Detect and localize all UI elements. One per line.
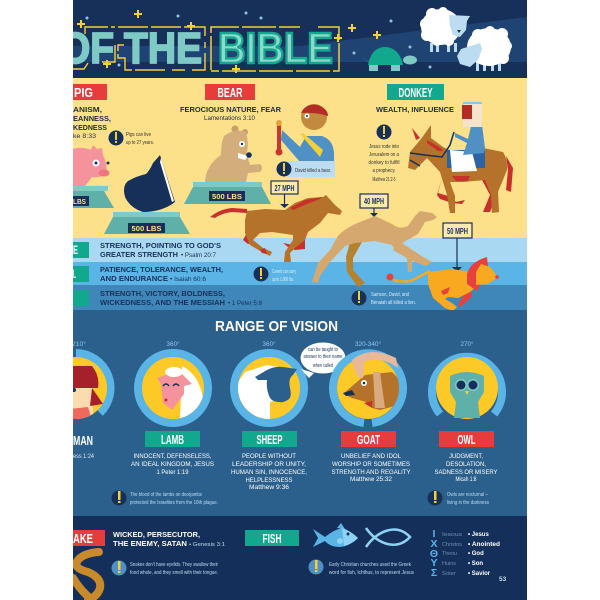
Greek acrostic: Iesous: [442, 532, 463, 538]
goat label and text: Matthew 25:32: [350, 477, 393, 483]
donkey fact: donkey to fulfill: [368, 160, 400, 166]
snake traits: • Genesis 3:1: [189, 542, 225, 548]
icon: fish: [313, 523, 358, 547]
title: THE: [124, 24, 202, 73]
pig traits: [73, 107, 110, 138]
degree labels: 210°: [72, 342, 87, 348]
circle: owl: [432, 357, 502, 419]
snake fact: food whole, and they smell with their tongue.: [130, 570, 218, 576]
icon: horse: [210, 195, 342, 262]
speech bubble: can be taught to: [308, 347, 338, 353]
lamb label and text: AN IDEAL KINGDOM, JESUS: [131, 461, 215, 468]
lamb label and text: 1 Peter 1:19: [156, 470, 189, 476]
pig traits: EANNESS,: [73, 114, 111, 123]
lion row: STRENGTH, VICTORY, BOLDNESS,: [100, 291, 225, 298]
snake fact: [112, 560, 218, 576]
circle: lamb: [138, 353, 208, 423]
fish label: FISH: [262, 531, 282, 546]
speed tag: 50 MPH: [443, 223, 472, 272]
icon: pig: [73, 145, 110, 186]
donkey fact: a prophecy.: [372, 168, 396, 174]
lion fact: [352, 290, 416, 306]
bear scale: 500 LBS: [212, 192, 242, 201]
owl fact: living in the darkness: [447, 500, 489, 506]
lion fact: Samson, David, and: [371, 292, 409, 298]
fish fact: Early Christian churches used the Greek: [329, 562, 411, 568]
icon: sheep sleeping: [457, 26, 512, 71]
lamb label and text: [131, 431, 215, 476]
donkey fact: Jesus rode into: [369, 144, 399, 150]
bear label: BEAR: [218, 85, 243, 100]
goat label and text: WORSHIP OR SOMETIMES: [332, 461, 411, 468]
Greek acrostic: Ι: [433, 528, 436, 540]
speech bubble: when called: [313, 363, 333, 369]
stars: [77, 10, 432, 73]
fact icon: David: [276, 162, 292, 176]
snake traits: WICKED, PERSECUTOR,: [113, 532, 200, 539]
sheep label and text: PEOPLE WITHOUT: [242, 453, 296, 460]
degree labels: [73, 342, 474, 346]
pig scale: LBS: [73, 199, 86, 206]
panel: header: [60, 0, 527, 78]
pig traits: ke 8:33: [73, 134, 97, 140]
camel row: PATIENCE, TOLERANCE, WEALTH,: [100, 267, 223, 274]
camel fact: up to 1,000 lbs.: [272, 277, 294, 283]
snake traits: THE ENEMY, SATAN: [113, 541, 187, 548]
speed tag: 40 MPH: [360, 194, 388, 217]
sheep label and text: HELPLESSNESS: [246, 477, 293, 484]
icon: sheep standing: [420, 7, 470, 52]
snake traits: [113, 532, 225, 548]
heading: RANGE OF VISION: [215, 318, 338, 335]
donkey fact: Jerusalem on a: [369, 152, 399, 158]
speed tag: 27 MPH: 27 MPH: [274, 184, 295, 193]
circle: sheep: [234, 353, 304, 423]
speed tag: 50 MPH: 50 MPH: [447, 227, 468, 236]
goat label and text: GOAT: [357, 432, 380, 447]
title: BIBLE: [218, 24, 333, 73]
woman label and text: [73, 433, 95, 460]
bear traits: FEROCIOUS NATURE, FEAR: [180, 105, 282, 114]
lamb label and text: LAMB: [161, 432, 184, 447]
degree labels: 360°: [166, 342, 180, 348]
fish fact: [308, 560, 414, 576]
Greek acrostic: Soter: [442, 571, 456, 577]
icon: snake: [73, 552, 100, 600]
donkey fact: [368, 124, 400, 183]
horse row: E: [73, 243, 78, 257]
panel: snake and fish: [73, 516, 527, 600]
horse row: [73, 242, 221, 259]
lamb fact: protected the Israelites from the 10th plague.: [130, 500, 218, 506]
fish label: [245, 530, 299, 546]
owl label and text: DESOLATION,: [446, 461, 486, 468]
owl label and text: [434, 431, 498, 483]
bear scale: [184, 182, 271, 204]
pig traits: KEDNESS: [73, 123, 107, 132]
degree labels: 320-340°: [355, 342, 382, 348]
owl fact: [428, 490, 489, 506]
camel row: AND ENDURANCE: [100, 276, 168, 283]
camel row: L: [73, 267, 76, 281]
woman label and text: MAN: [73, 433, 93, 448]
speech bubble: answer to their name: [304, 354, 343, 360]
Greek acrostic: Θ: [430, 548, 438, 560]
owl label and text: JUDGMENT,: [449, 453, 483, 460]
Greek acrostic: • Anointed: [468, 542, 500, 548]
pig fact: Pigs can live: [126, 132, 151, 138]
Greek acrostic: Theou: [442, 551, 457, 557]
donkey label: [387, 84, 444, 100]
pig scale: [73, 186, 114, 208]
horse row: GREATER STRENGTH: [100, 252, 178, 259]
circle: goat: [333, 352, 403, 423]
owl fact: Owls are nocturnal –: [447, 492, 488, 498]
donkey traits: WEALTH, INFLUENCE: [376, 105, 454, 114]
sheep label and text: SHEEP: [256, 432, 283, 447]
goat label and text: UNBELIEF AND IDOL: [341, 453, 401, 460]
title: OF: [60, 24, 114, 73]
Greek acrostic: • Son: [468, 561, 483, 567]
panel: large animals on yellow: [73, 78, 527, 238]
sheep label and text: Matthew 9:36: [249, 485, 290, 491]
camel row: • Isaiah 60:6: [170, 277, 207, 283]
icon: turtle: [362, 47, 417, 71]
icon: lion: [386, 257, 499, 311]
snake label: AKE: [73, 531, 93, 546]
sheep label and text: HUMAN SIN, INNOCENCE,: [231, 469, 307, 476]
Greek acrostic: • Jesus: [468, 532, 489, 538]
icon: donkey and rider: [408, 102, 513, 213]
Greek acrostic: • God: [468, 551, 484, 557]
panel: meaning bands: [73, 238, 527, 310]
horse row: STRENGTH, POINTING TO GOD'S: [100, 243, 221, 250]
snake fact: Snakes don't have eyelids. They swallow their: [130, 562, 218, 568]
donkey label: DONKEY: [398, 85, 433, 100]
speed tag: 40 MPH: 40 MPH: [364, 197, 384, 206]
icon: ichthys: [366, 528, 410, 547]
title: [73, 26, 340, 72]
lion row: [73, 290, 263, 307]
piano scale: 500 LBS: [132, 224, 162, 233]
Greek acrostic: Χ: [430, 538, 438, 550]
lion row: • 1 Peter 5:8: [228, 301, 263, 307]
lion fact: Benaiah all killed a lion.: [371, 300, 416, 306]
horse row: • Psalm 20:7: [181, 253, 217, 259]
pig fact: [108, 130, 154, 146]
camel row: [73, 266, 223, 283]
page number: 53: [499, 576, 507, 583]
bear traits: [180, 107, 281, 120]
pig traits: ANISM,: [73, 105, 102, 114]
icon: David with bowl: David killed a bear.: [295, 168, 331, 174]
pig label: [73, 84, 107, 100]
woman label and text: ess 1:24: [73, 454, 95, 460]
degree labels: 360°: [262, 342, 276, 348]
Greek acrostic: • Savior: [468, 571, 491, 577]
sheep label and text: LEADERSHIP OR UNITY,: [232, 461, 306, 468]
Greek acrostic: Υ: [430, 557, 438, 569]
lamb label and text: INNOCENT, DEFENSELESS,: [134, 453, 212, 460]
Greek acrostic: Christos: [442, 542, 463, 548]
Greek acrostic: Σ: [431, 567, 437, 579]
circle: woman: [45, 353, 111, 420]
donkey fact: Matthew 21:2-5: [372, 177, 396, 183]
goat label and text: [332, 431, 411, 483]
owl label and text: SADNESS OR MISERY: [434, 469, 498, 476]
lion row: WICKEDNESS, AND THE MESSIAH: [100, 300, 225, 307]
degree labels: 270°: [460, 342, 474, 348]
pig label: PIG: [74, 85, 93, 100]
owl label and text: Micah 1:8: [456, 477, 477, 483]
speech bubble: [300, 342, 346, 378]
icon: David with bowl: [276, 104, 335, 177]
lamb fact: [112, 490, 218, 506]
lamb fact: The blood of the lambs on doorjambs: [130, 492, 202, 498]
bear traits: Lamentations 3:10: [204, 116, 256, 122]
camel fact: [254, 266, 296, 283]
pig fact: up to 27 years.: [126, 140, 154, 146]
panel: range of vision: [45, 310, 527, 516]
goat label and text: STRENGTH AND REGALITY: [332, 469, 411, 476]
Greek acrostic: Huios: [442, 561, 457, 567]
fish fact: word for fish, Ichthus, to represent Jesus: [329, 570, 414, 576]
bear label: [205, 84, 255, 100]
icon: whale/piano shape: [124, 155, 175, 212]
piano scale: [104, 212, 190, 234]
icon: camel: [312, 211, 437, 287]
Greek acrostic: [430, 528, 500, 579]
owl label and text: OWL: [458, 432, 476, 447]
speed tag: 27 MPH: [271, 181, 298, 208]
icon: bear: [205, 126, 262, 182]
camel fact: Camels can carry: [272, 269, 296, 275]
sheep label and text: [231, 431, 307, 491]
